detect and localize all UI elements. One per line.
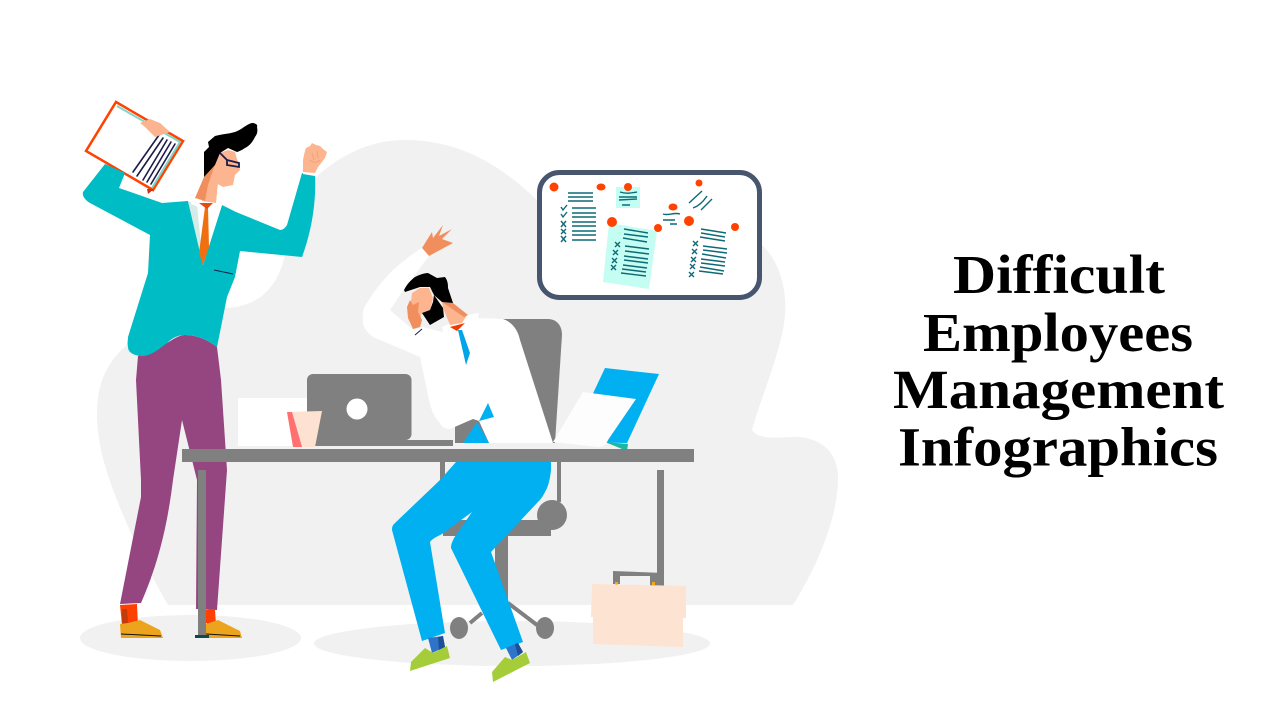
- chair frame: [440, 462, 445, 532]
- title: Management: [893, 359, 1225, 420]
- neck: [442, 302, 467, 325]
- beard: [422, 295, 444, 325]
- floor shadow: standing man: [80, 615, 301, 661]
- pocket line: [214, 270, 233, 274]
- cup: [287, 411, 322, 447]
- title: Infographics: [898, 416, 1218, 478]
- hair: [204, 123, 257, 177]
- title: [893, 244, 1225, 478]
- face: [215, 150, 240, 187]
- paper stack: [238, 398, 307, 446]
- seated man legs: [392, 462, 551, 682]
- white shirt: [363, 248, 553, 443]
- blue trousers: [392, 462, 551, 650]
- face: [410, 288, 433, 325]
- cyan notes: [603, 187, 657, 289]
- wall board with notes: [540, 172, 760, 298]
- blue folder: [570, 368, 659, 451]
- jacket: [83, 164, 315, 356]
- chair: [440, 319, 567, 639]
- desk: [182, 449, 694, 638]
- neck: [202, 165, 218, 203]
- raised hand: [422, 225, 453, 256]
- socks: [428, 636, 445, 653]
- tie knot: [450, 323, 465, 331]
- clipboard: [86, 102, 183, 194]
- title: Difficult: [953, 244, 1166, 305]
- seated man upper body: [363, 225, 636, 447]
- white sheet: [553, 392, 636, 447]
- briefcase: [591, 571, 686, 647]
- board frame: [540, 172, 760, 298]
- title: Employees: [923, 302, 1193, 363]
- raised fist: [303, 143, 327, 173]
- shirt and tie: [188, 200, 222, 265]
- red pins: [550, 180, 739, 232]
- cuff: [415, 329, 422, 335]
- socks and shoes: [120, 604, 242, 638]
- note lines: [561, 191, 727, 277]
- glasses: [220, 153, 239, 167]
- hair: [404, 273, 453, 303]
- laptop: [307, 374, 453, 446]
- hand on face: [407, 300, 422, 329]
- chair back: [455, 319, 562, 443]
- green shoes: [410, 646, 450, 671]
- background blob: [97, 140, 838, 605]
- tie: [458, 330, 470, 365]
- standing man: [83, 102, 327, 638]
- trousers: [120, 335, 227, 610]
- jacket-lining accents: [463, 422, 489, 443]
- floor shadow: desk: [314, 621, 710, 666]
